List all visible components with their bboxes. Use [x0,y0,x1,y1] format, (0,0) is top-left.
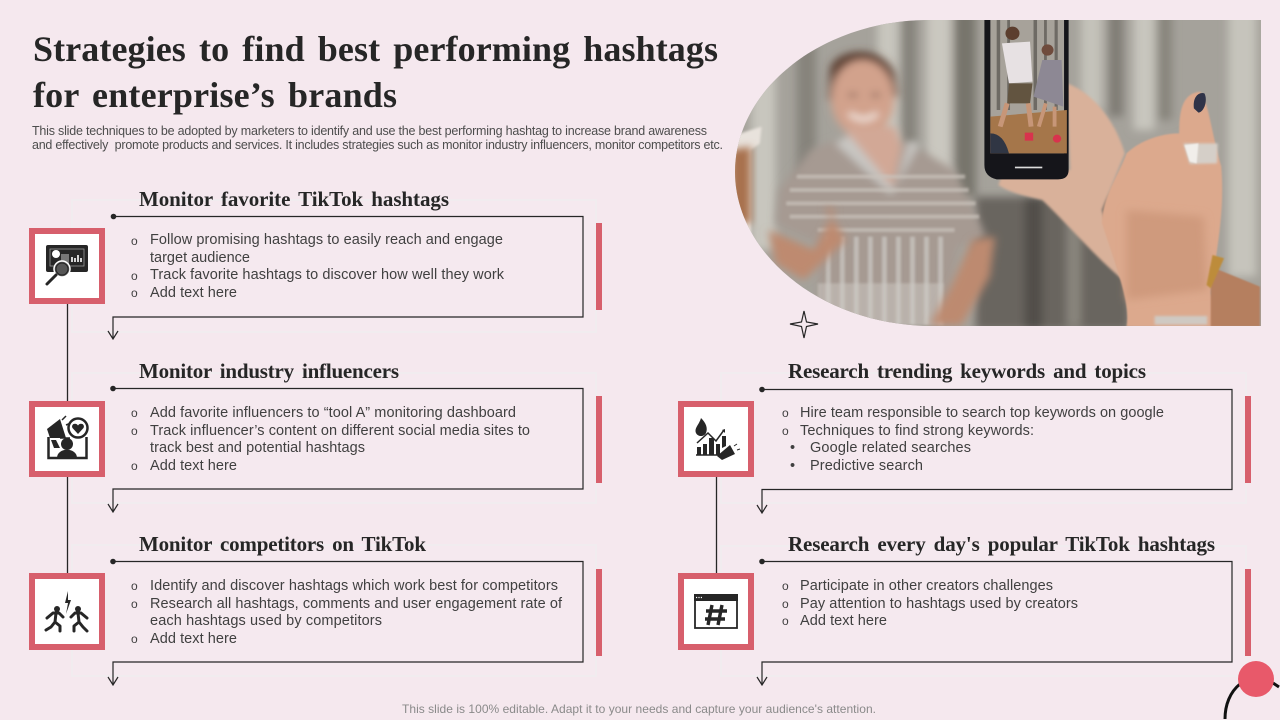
curtain folds [751,10,1280,330]
title: Strategies to find best performing hashtags [33,29,718,69]
title: for enterprise’s brands [33,75,397,115]
icon: four-point star [790,311,818,338]
photo: person filming a dancer on a phone [730,10,1280,330]
bullet text: Hire team responsible to search top keywords on google [800,405,1164,421]
left person edge [735,126,762,233]
bullet text: o [131,286,138,300]
bullet text: Track influencer’s content on different social media sites to [150,423,530,439]
blurred woman [776,51,986,325]
heading: Monitor favorite TikTok hashtags [139,187,449,211]
panel: monitor competitors on TikTok [32,532,602,685]
bullet text: Add text here [150,458,237,474]
heading: Research every day's popular TikTok hashtags [788,532,1215,556]
bullet text: target audience [150,250,250,266]
bullet text: Identify and discover hashtags which work best for competitors [150,578,558,594]
bullet text: Follow promising hashtags to easily reach and engage [150,232,503,248]
panel: monitor industry influencers [32,359,602,512]
bullet text: o [782,614,789,628]
bullet text: Google related searches [810,440,971,456]
bullet text: Add text here [150,285,237,301]
bullet text: o [782,597,789,611]
bullet text: o [131,406,138,420]
bullet text: o [782,406,789,420]
bullet text: o [131,597,138,611]
heading: Monitor competitors on TikTok [139,532,426,556]
bullet text: Track favorite hashtags to discover how well they work [150,267,505,283]
bullet text [782,578,1078,629]
subtitle text: and effectively promote products and services. It includes strategies such as monitor industry influencers, monitor competitors etc. [32,138,723,152]
heading: Monitor industry influencers [139,359,399,383]
panel: research trending keywords and topics [681,359,1251,513]
bullet text: Participate in other creators challenges [800,578,1053,594]
bullet text: • [790,440,795,456]
bullet text: Techniques to find strong keywords: [800,423,1034,439]
connector: right timeline [716,477,718,573]
footer note: This slide is 100% editable. Adapt it to your needs and capture your audience's attention. [402,702,876,716]
connector: left timeline [66,304,68,573]
dancers in phone [1002,42,1032,83]
bullet text: Add text here [800,613,887,629]
bullet text: o [782,424,789,438]
panel: research every day's popular TikTok hashtags [681,532,1251,685]
bullet text: o [131,632,138,646]
bracelets [1207,255,1224,288]
bullet text: Predictive search [810,458,923,474]
forearm [1211,267,1260,327]
subtitle text [32,124,723,152]
bullet text: o [131,234,138,248]
bullet text: Add text here [150,631,237,647]
panel: monitor favorite TikTok hashtags [32,187,602,339]
phone [984,10,1069,179]
icon: two runners and lightning bolt [32,576,102,647]
nail and ring [1194,93,1206,113]
bullet text [131,578,563,647]
bullet text [131,232,505,301]
foreground hand [1102,92,1222,327]
woman's arms [769,207,995,325]
bullet text: o [131,269,138,283]
bullet text: each hashtags used by competitors [150,613,382,629]
bullet text: track best and potential hashtags [150,440,365,456]
decoration: corner arc and pink circle [1225,661,1279,719]
icon: flame, growth chart and megaphone [681,404,751,474]
icon: presentation with magnifier [32,231,102,301]
title [33,29,718,115]
bullet text: Add favorite influencers to “tool A” monitoring dashboard [150,405,516,421]
bullet text: o [782,579,789,593]
heading: Research trending keywords and topics [788,359,1146,383]
bullet text: o [131,459,138,473]
subtitle text: This slide techniques to be adopted by marketers to identify and use the best performing hashtag to increase brand awareness [32,124,707,138]
bullet text [782,405,1164,474]
icon: megaphone, heart and person [32,404,102,474]
icon: browser window with hashtag [681,576,751,647]
bullet text: Pay attention to hashtags used by creators [800,596,1078,612]
bullet text [131,405,530,474]
bullet text: • [790,458,795,474]
dress stripes [786,177,979,325]
holding hand [998,83,1125,280]
bullet text: o [131,579,138,593]
bullet text: Research all hashtags, comments and user engagement rate of [150,596,563,612]
bullet text: o [131,424,138,438]
